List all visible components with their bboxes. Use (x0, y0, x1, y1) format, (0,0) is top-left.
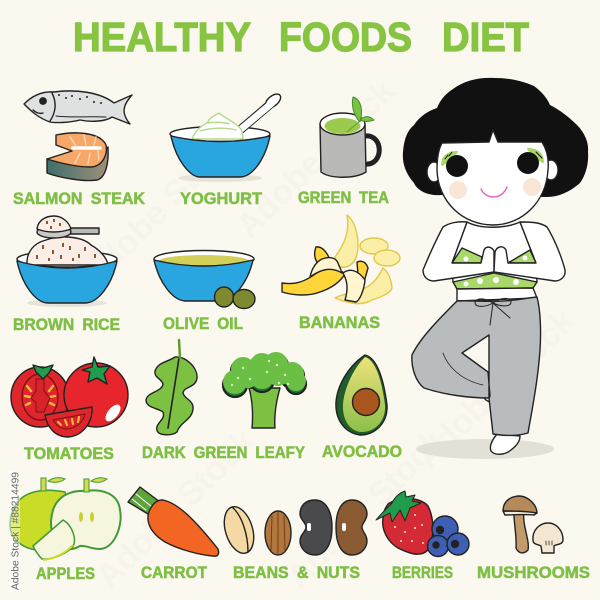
bra triangles (452, 248, 482, 263)
icon: carrot (128, 487, 219, 556)
midriff (457, 288, 537, 301)
icon: dark green leafy (146, 340, 197, 435)
pants (412, 297, 541, 435)
title (73, 14, 529, 60)
icon: yoghurt bowl with spoon (170, 91, 283, 182)
label: brown rice: BROWN RICE (13, 316, 120, 334)
title: DIET (442, 14, 529, 60)
icon: bananas (282, 215, 400, 304)
icon: olive oil bowl (154, 250, 255, 308)
drawstring (475, 298, 511, 325)
icon: green tea mug (320, 97, 379, 177)
hair (403, 78, 588, 197)
bra band (453, 273, 537, 289)
right arm and hand (494, 222, 565, 281)
label: apples: APPLES (36, 565, 95, 583)
left arm and hand (423, 222, 494, 281)
smile (481, 187, 507, 197)
label: olive oil: OLIVE OIL (163, 315, 243, 333)
label: green tea: GREEN TEA (298, 189, 389, 207)
text: Adobe Stock (279, 422, 453, 596)
label: beans and nuts: BEANS & NUTS (233, 564, 360, 582)
knee gap (462, 335, 490, 398)
face (437, 130, 548, 225)
icon: mushrooms (503, 496, 563, 553)
label: bananas: BANANAS (299, 314, 380, 332)
label: carrot: CARROT (141, 564, 207, 582)
stock watermark id: Adobe Stock | #88214499 (10, 472, 22, 590)
label: tomatoes: TOMATOES (24, 445, 114, 463)
icon: tomatoes (11, 357, 128, 437)
icon: apples (10, 478, 121, 560)
text: Adobe Stock (229, 72, 403, 246)
character: yoga girl (403, 78, 588, 459)
icon: beans and nuts (219, 500, 367, 557)
label: salmon steak: SALMON STEAK (13, 190, 145, 208)
standing foot (490, 434, 520, 454)
label: mushrooms: MUSHROOMS (477, 564, 590, 582)
icon: salmon steak (47, 133, 108, 181)
icon: broccoli (223, 352, 306, 428)
icon: berries (376, 491, 469, 556)
icon: fish (24, 91, 132, 124)
label: yoghurt: YOGHURT (180, 190, 262, 208)
text: Adobe Stock (409, 302, 583, 476)
torso (452, 222, 537, 282)
label: berries: BERRIES (392, 564, 453, 582)
ears (427, 162, 441, 182)
text: Adobe Stock (89, 422, 263, 596)
text: Adobe Stock (74, 122, 248, 296)
white foot of bent leg (483, 372, 493, 404)
label: avocado: AVOCADO (322, 443, 402, 461)
label: dark green leafy: DARK GREEN LEAFY (142, 444, 305, 462)
cheeks (449, 181, 467, 199)
eyes (442, 149, 543, 177)
title: FOODS (279, 14, 412, 60)
title: HEALTHY (73, 14, 251, 60)
icon: brown rice bowl (17, 216, 117, 307)
icon: avocado (336, 355, 387, 435)
ground shadow (416, 439, 554, 459)
